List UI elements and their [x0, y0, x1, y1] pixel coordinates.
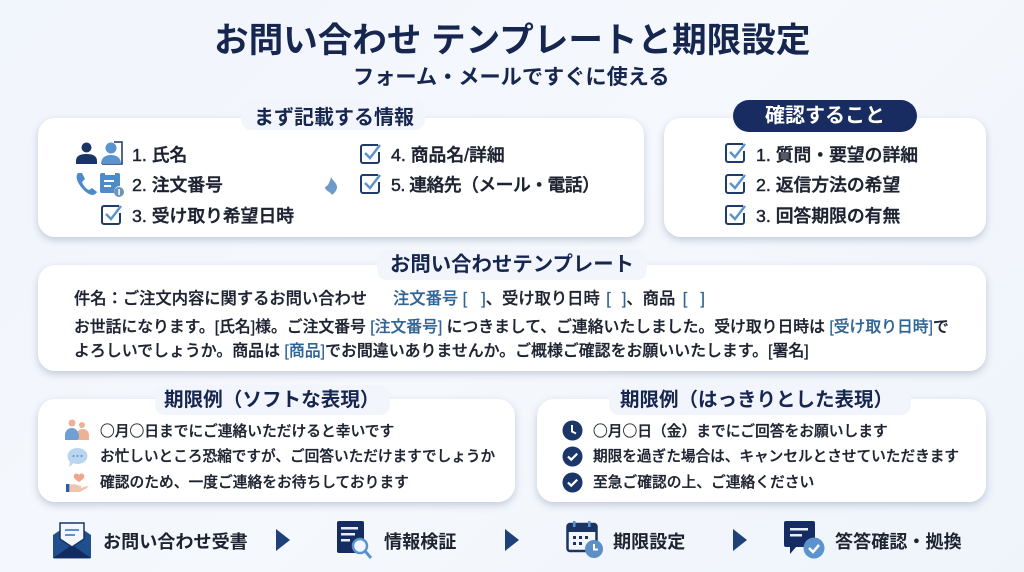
- heading: template: お問い合わせテンプレート: [390, 254, 634, 276]
- panel: firm deadlines: [537, 399, 986, 502]
- icon: calendar clock: [566, 521, 603, 558]
- heading: soft: 期限例（ソフトな表現）: [164, 389, 380, 411]
- icon: checkbox: [725, 205, 746, 225]
- step 2 label: 情報検証: [384, 532, 456, 552]
- icon: phone: [76, 173, 97, 195]
- icon: person: [76, 142, 97, 164]
- icon: order form: [100, 173, 124, 197]
- heading tab: basic info: [241, 100, 425, 130]
- item 2: 2. 注文番号: [132, 175, 223, 195]
- item 4: 4. 商品名/詳細: [391, 145, 505, 165]
- icon: people: [65, 420, 89, 440]
- soft item 2: お忙しいところ恐縮ですが、ご回答いただけますでしょうか: [100, 449, 495, 465]
- heading tab: template: [377, 250, 647, 280]
- soft item 3: 確認のため、一度ご連絡をお待ちしております: [100, 475, 409, 491]
- icon: contact card: [101, 141, 123, 165]
- icon: reply bubble check: [784, 521, 824, 558]
- step 4 label: 答答確認・拠換: [835, 532, 962, 552]
- item 1: 1. 氏名: [132, 145, 187, 165]
- title: お問い合わせ テンプレートと期限設定: [214, 22, 810, 60]
- heading tab: firm: [609, 385, 911, 415]
- firm item 1: ○月○日（金）までにご回答をお願いします: [593, 420, 888, 441]
- confirm item 1: 1. 質問・要望の詳細: [756, 145, 918, 165]
- soft item 1: ○月○日までにご連絡いただけると幸いです: [100, 420, 394, 441]
- item 5: 5. 連絡先（メール・電話）: [391, 175, 599, 195]
- heading: basic info: まず記載する情報: [254, 107, 414, 129]
- icon: clock: [562, 420, 582, 440]
- arrow: [276, 529, 290, 551]
- template body line 2: よろしいでしょうか。商品は [商品]でお間違いありませんか。ご概様ご確認をお願いいたします。[署名]: [74, 343, 809, 360]
- panel: soft deadlines: [38, 399, 515, 502]
- icon: checkbox: [360, 174, 381, 194]
- arrow: [505, 529, 519, 551]
- confirm item 2: 2. 返信方法の希望: [756, 175, 900, 195]
- template subject line: 件名：ご注文内容に関するお問い合わせ: [74, 290, 367, 308]
- item 3: 3. 受け取り希望日時: [132, 206, 294, 226]
- icon: check circle: [562, 472, 582, 492]
- icon: checkbox: [725, 143, 746, 163]
- heading: firm: 期限例（はっきりとした表現）: [620, 389, 893, 411]
- firm item 3: 至急ご確認の上、ご連絡ください: [593, 475, 814, 491]
- icon: document search: [337, 521, 372, 559]
- heading pill: confirm: [733, 100, 917, 132]
- icon: checkbox: [725, 174, 746, 194]
- icon: small drop: [325, 177, 337, 195]
- icon: checkbox: [101, 205, 122, 225]
- step 1 label: お問い合わせ受書: [103, 532, 248, 552]
- firm item 2: 期限を過ぎた場合は、キャンセルとさせていただきます: [593, 449, 959, 465]
- heading pill: confirm: 確認すること: [765, 105, 885, 127]
- panel: template: [38, 265, 986, 371]
- panel: basic info: [38, 118, 644, 237]
- arrow: [733, 529, 747, 551]
- icon: heart in hand: [66, 474, 88, 492]
- template subject fields: 注文番号 [ ]、受け取り日時 [ ]、商品 [ ]: [393, 290, 705, 308]
- confirm item 3: 3. 回答期限の有無: [756, 206, 900, 226]
- icon: checkbox: [360, 144, 381, 164]
- heading tab: soft: [155, 385, 390, 415]
- subtitle: フォーム・メールですぐに使える: [353, 66, 670, 89]
- icon: check circle: [562, 446, 582, 466]
- icon: envelope: [53, 522, 91, 558]
- icon: speech bubble: [68, 448, 88, 467]
- step 3 label: 期限設定: [613, 532, 685, 552]
- panel: confirm: [664, 118, 986, 237]
- template body line 1: お世話になります。[氏名]様。ご注文番号 [注文番号] につきまして、ご連絡いたしました。受け取り日時は [受け取り日時]で: [74, 319, 949, 336]
